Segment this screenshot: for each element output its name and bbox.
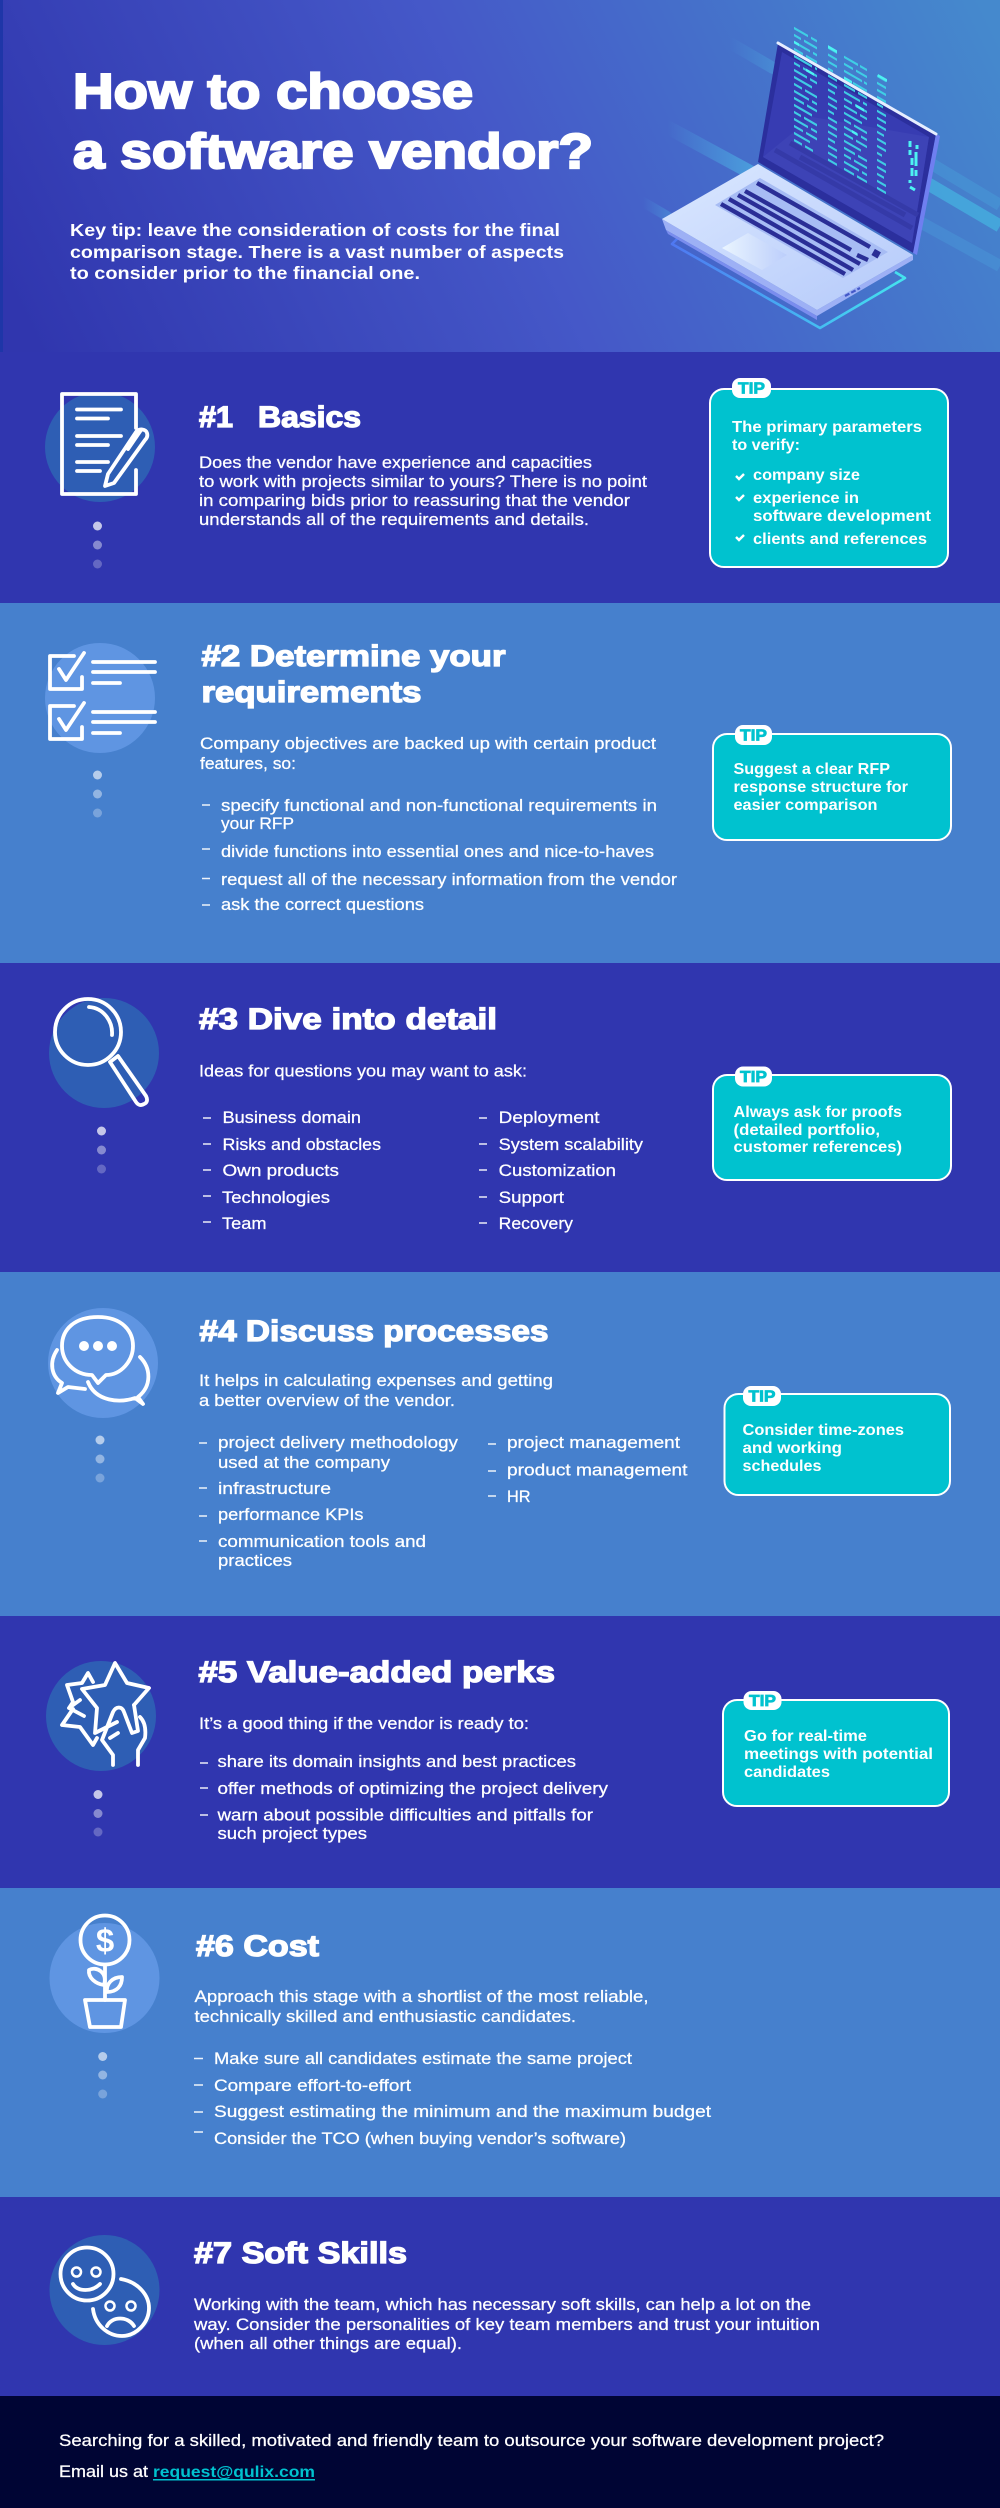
progress dots <box>98 2052 107 2098</box>
tip card: TIP <box>740 728 767 744</box>
tip card: software development <box>753 508 931 525</box>
heading: #7 Soft Skills <box>194 2237 407 2270</box>
list: left column: used at the company <box>218 1454 391 1472</box>
intro text: It’s a good thing if the vendor is ready to: <box>199 1715 529 1733</box>
tip card: candidates <box>744 1764 830 1781</box>
tip card: Suggest a clear RFP <box>734 761 890 778</box>
heading: #3 Dive into detail <box>199 1003 497 1036</box>
bullet list: Compare effort-to-effort <box>214 2077 412 2095</box>
email line: request@qulix.com <box>153 2464 315 2481</box>
intro text <box>194 1988 648 2026</box>
bullet list <box>202 797 678 914</box>
panel: #6 Cost <box>0 1888 1000 2197</box>
tip card <box>724 1386 950 1495</box>
bullet list <box>200 1753 609 1843</box>
list: left column <box>199 1434 459 1570</box>
tip card <box>723 1691 949 1806</box>
bullet list: share its domain insights and best practices <box>218 1753 576 1771</box>
list: left column <box>203 1109 381 1233</box>
bullet list: request all of the necessary information from the vendor <box>221 871 678 889</box>
list: right column: Recovery <box>499 1215 574 1233</box>
icon: document with pen <box>45 392 155 502</box>
panel: #3 Dive into detail <box>0 963 1000 1272</box>
list: right column: Customization <box>499 1162 616 1180</box>
intro text: It helps in calculating expenses and getting <box>199 1372 553 1390</box>
title <box>73 65 593 179</box>
heading: requirements <box>202 676 422 709</box>
list: left column: communication tools and <box>218 1533 426 1551</box>
list: left column: infrastructure <box>218 1480 331 1498</box>
heading: #6 Cost <box>196 1930 319 1963</box>
tip card: response structure for <box>734 779 908 796</box>
list: left column: practices <box>218 1552 292 1570</box>
illustration: laptop <box>643 27 1000 328</box>
heading: #2 Determine your <box>202 640 506 673</box>
panel: footer <box>0 2396 1000 2508</box>
heading: Basics <box>258 401 361 434</box>
list: left column: Own products <box>222 1162 339 1180</box>
list: left column: Business domain <box>222 1109 361 1127</box>
tip card: TIP <box>738 380 765 398</box>
tip card: customer references) <box>734 1139 902 1156</box>
panel: header <box>0 0 1000 352</box>
bullet list: such project types <box>218 1825 367 1843</box>
call to action text: Searching for a skilled, motivated and friendly team to outsource your software development project? <box>59 2432 884 2450</box>
body text <box>199 454 648 529</box>
bullet list: specify functional and non-functional requirements in <box>221 797 657 815</box>
intro text: a better overview of the vendor. <box>199 1392 455 1410</box>
progress dots <box>93 770 102 818</box>
bullet list <box>194 2050 712 2148</box>
intro text: technically skilled and enthusiastic candidates. <box>194 2008 576 2026</box>
icon: hand with stars <box>46 1661 156 1771</box>
body text: way. Consider the personalities of key team members and trust your intuition <box>193 2316 820 2334</box>
list: left column: Risks and obstacles <box>222 1136 381 1154</box>
icon: money plant: $ <box>96 1922 114 1959</box>
intro text: Company objectives are backed up with certain product <box>200 735 657 753</box>
body text: in comparing bids prior to reassuring that the vendor <box>199 492 631 510</box>
body text <box>193 2296 820 2353</box>
list: left column: project delivery methodology <box>218 1434 459 1452</box>
progress dots <box>97 1126 106 1174</box>
tip card: meetings with potential <box>744 1746 933 1763</box>
list: right column: project management <box>507 1434 681 1452</box>
tip card: and working <box>742 1440 842 1457</box>
body text: (when all other things are equal). <box>194 2335 462 2353</box>
tip card: The primary parameters <box>732 419 922 436</box>
icon: smiley and sad faces <box>50 2235 160 2345</box>
tip card: Consider time-zones <box>742 1422 904 1439</box>
bullet list: warn about possible difficulties and pitfalls for <box>216 1806 594 1824</box>
heading <box>202 640 506 709</box>
tip card: company size <box>753 467 860 484</box>
intro text <box>199 1372 553 1410</box>
key tip text: comparison stage. There is a vast number of aspects <box>70 242 564 262</box>
bullet list: your RFP <box>221 815 294 833</box>
body text: to work with projects similar to yours? There is no point <box>199 473 648 491</box>
tip card: TIP <box>740 1069 767 1086</box>
icon: money plant <box>50 1916 160 2033</box>
icon: magnifier <box>49 998 159 1108</box>
tip card <box>713 725 951 840</box>
heading <box>199 401 361 434</box>
tip card: (detailed portfolio, <box>734 1122 880 1139</box>
tip card: easier comparison <box>734 797 878 814</box>
panel: #5 Value-added perks <box>0 1616 1000 1888</box>
bullet list: divide functions into essential ones and nice-to-haves <box>221 843 654 861</box>
tip card: TIP <box>749 1693 776 1710</box>
intro text <box>200 735 657 773</box>
bullet list: offer methods of optimizing the project delivery <box>218 1780 609 1798</box>
list: left column: Team <box>222 1215 266 1233</box>
list: right column <box>488 1434 688 1506</box>
key tip text <box>70 220 564 283</box>
list: left column: performance KPIs <box>218 1506 364 1524</box>
intro text: Approach this stage with a shortlist of the most reliable, <box>194 1988 648 2006</box>
tip card <box>713 1066 951 1180</box>
bullet list: ask the correct questions <box>221 896 424 914</box>
icon: checklist <box>45 643 155 753</box>
email line: Email us at <box>59 2463 149 2481</box>
progress dots <box>93 522 102 568</box>
heading: #4 Discuss processes <box>200 1315 548 1348</box>
tip card: clients and references <box>753 531 927 548</box>
list: right column <box>479 1109 644 1233</box>
list: right column: HR <box>507 1488 531 1506</box>
intro text: Ideas for questions you may want to ask: <box>199 1062 527 1080</box>
bullet list: Suggest estimating the minimum and the maximum budget <box>214 2103 712 2121</box>
list: right column: Deployment <box>499 1109 600 1127</box>
tip card: Always ask for proofs <box>734 1104 902 1121</box>
email line <box>59 2463 315 2481</box>
body text: understands all of the requirements and details. <box>199 511 589 529</box>
tip card: TIP <box>748 1388 776 1406</box>
key tip text: to consider prior to the financial one. <box>70 263 420 283</box>
bullet list: Make sure all candidates estimate the same project <box>214 2050 633 2068</box>
panel: #7 Soft Skills <box>0 2197 1000 2396</box>
heading: #5 Value-added perks <box>198 1656 555 1689</box>
list: right column: System scalability <box>499 1136 644 1154</box>
list: left column: Technologies <box>222 1189 330 1207</box>
icon: speech bubbles <box>48 1308 158 1418</box>
panel: #1 Basics <box>0 352 1000 603</box>
key tip text: Key tip: leave the consideration of costs for the final <box>70 220 560 240</box>
bullet list: Consider the TCO (when buying vendor’s software) <box>214 2130 626 2148</box>
progress dots <box>94 1790 102 1836</box>
heading: #1 <box>199 401 233 434</box>
tip card: schedules <box>742 1458 822 1475</box>
tip card <box>710 378 948 567</box>
progress dots <box>96 1436 104 1482</box>
intro text: features, so: <box>200 755 296 773</box>
tip card: experience in <box>753 490 859 507</box>
title: How to choose <box>73 65 473 119</box>
tip card: to verify: <box>732 437 800 454</box>
body text: Does the vendor have experience and capacities <box>199 454 592 472</box>
tip card: Go for real-time <box>744 1728 867 1745</box>
list: right column: product management <box>507 1462 688 1480</box>
panel: #4 Discuss processes <box>0 1272 1000 1616</box>
body text: Working with the team, which has necessary soft skills, can help a lot on the <box>194 2296 811 2314</box>
list: right column: Support <box>499 1189 565 1207</box>
title: a software vendor? <box>73 125 593 179</box>
panel: #2 Determine your requirements <box>0 603 1000 963</box>
